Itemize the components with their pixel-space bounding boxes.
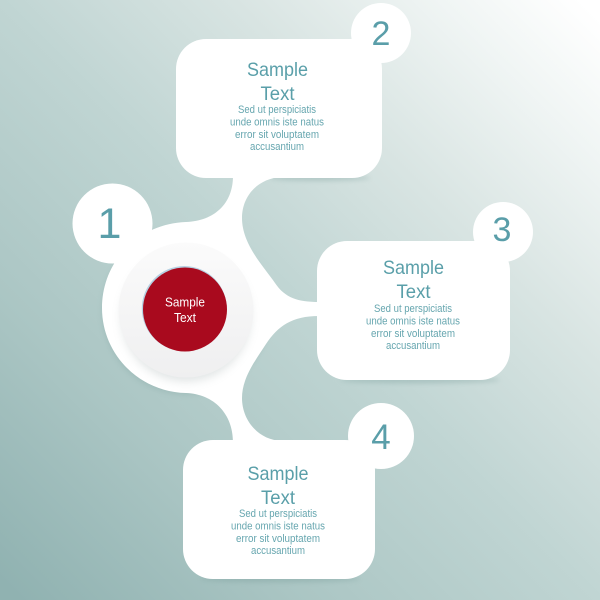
heading 2: Sample (247, 59, 308, 81)
body text 2 (230, 104, 324, 153)
heading 4 (248, 463, 308, 509)
number 2: 2 (372, 15, 390, 53)
badge circle 3 (473, 202, 533, 262)
body text 2: unde omnis iste natus (230, 116, 324, 128)
connector shape: central hub joined to panels (102, 176, 319, 442)
number 4: 4 (371, 418, 391, 457)
central label: Text (174, 311, 196, 325)
badge circle 4 (348, 403, 414, 469)
heading 3: Sample (383, 257, 444, 279)
body text 3 (366, 303, 460, 352)
central label (165, 296, 205, 325)
central label: Sample (165, 296, 205, 310)
heading 4: Text (261, 487, 296, 509)
body text 3: unde omnis iste natus (366, 316, 460, 328)
heading 2: Text (260, 83, 295, 105)
central red circle (142, 266, 227, 352)
body text 3: error sit voluptatem (371, 328, 455, 340)
heading 3 (383, 257, 444, 303)
body text 4: accusantium (251, 545, 305, 557)
drop shadows under panels (200, 175, 500, 582)
number 3: 3 (493, 211, 511, 249)
panel 2: top box (176, 3, 411, 178)
body text 2: Sed ut perspiciatis (238, 104, 316, 116)
heading 4: Sample (248, 463, 308, 485)
hub shadow (102, 227, 270, 395)
body text 2: error sit voluptatem (235, 129, 319, 141)
body text 3: Sed ut perspiciatis (374, 303, 452, 315)
body text 4 (231, 508, 325, 557)
number 1: 1 (98, 200, 121, 248)
panel 3: right box (317, 202, 533, 380)
body text 3: accusantium (386, 340, 440, 352)
badge circle 2 (351, 3, 411, 63)
heading 2 (247, 59, 308, 105)
body text 2: accusantium (250, 141, 304, 153)
body text 4: Sed ut perspiciatis (239, 508, 317, 520)
panel 4: bottom box (183, 403, 414, 579)
central disc (118, 242, 254, 378)
body text 4: unde omnis iste natus (231, 520, 325, 532)
body text 4: error sit voluptatem (236, 533, 320, 545)
heading 3: Text (396, 281, 431, 303)
central disc shadow (122, 253, 250, 381)
badge 1 (72, 184, 152, 264)
